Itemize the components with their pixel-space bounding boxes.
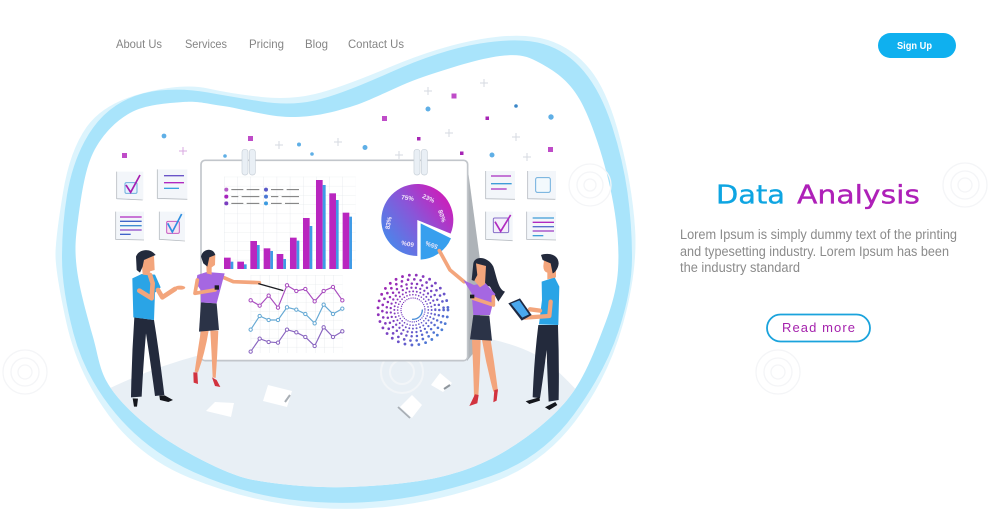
person: presenting woman: [193, 250, 283, 387]
navigation: About Us: [116, 37, 162, 51]
navigation: Pricing: [249, 37, 284, 51]
pie labels: 80%: [436, 209, 447, 224]
shirt: [132, 274, 161, 320]
pointer: [258, 284, 283, 291]
hair back: [472, 258, 505, 302]
shirt: [463, 280, 495, 315]
card: lines: [157, 169, 187, 199]
board clips: [242, 149, 427, 175]
red shoes: [469, 389, 498, 406]
phone: [215, 285, 219, 290]
read more button: Read more: [782, 320, 855, 335]
presentation board: [201, 149, 468, 361]
skirt: [470, 315, 492, 341]
violet line: [249, 326, 344, 353]
legs: [472, 340, 498, 397]
watermark spirals: [3, 163, 987, 394]
paper: crumpled: [263, 385, 292, 407]
trousers: [131, 317, 164, 397]
board panel: [201, 160, 468, 361]
arms: [139, 275, 175, 298]
person: thinking man: [131, 250, 185, 407]
blob background: [55, 36, 635, 509]
confetti: [122, 79, 554, 161]
arm bent: [473, 297, 493, 305]
description: the industry standard: [680, 260, 800, 275]
card: empty box: [528, 171, 556, 199]
navigation: Services: [185, 37, 227, 51]
sign up button: [878, 33, 956, 58]
hand: [175, 286, 185, 290]
navigation: Blog: [305, 37, 328, 51]
pie labels: 60%: [401, 239, 415, 248]
line chart: [249, 275, 344, 353]
paper: center: [398, 395, 422, 418]
skirt: [199, 302, 219, 332]
paper: left: [206, 402, 234, 417]
floor: [110, 340, 575, 488]
title: Analysis: [797, 180, 920, 210]
description: and typesetting industry. Lorem Ipsum has been: [680, 244, 949, 259]
shoes: [133, 395, 173, 407]
pie labels: [385, 193, 447, 250]
read more button: [767, 314, 870, 342]
arm pointing: [222, 277, 259, 283]
shirt: [539, 277, 559, 325]
bar chart: [224, 177, 356, 269]
magenta bars: [224, 180, 349, 269]
card: blue check: [159, 212, 185, 241]
person: man with tablet: [508, 254, 559, 410]
tablet: [508, 298, 532, 321]
pie labels: 55%: [424, 239, 439, 250]
head: [474, 263, 486, 287]
magenta line: [249, 284, 344, 309]
radial dot chart: [378, 275, 448, 345]
sign up button: Sign Up: [897, 41, 932, 52]
head: [206, 255, 215, 275]
red shoes: [193, 372, 220, 387]
blue line: [249, 303, 344, 331]
hair: [541, 254, 559, 273]
card: lines right: [486, 171, 515, 199]
title: [716, 180, 920, 210]
title: Data: [716, 180, 785, 210]
blue bars: [231, 185, 352, 269]
paper: right: [431, 373, 452, 392]
head: [543, 260, 556, 279]
left note cards: [116, 169, 187, 241]
card: check mark: [117, 172, 143, 200]
navigation: Contact Us: [348, 37, 404, 51]
legs: [195, 331, 218, 378]
hair: [201, 250, 215, 267]
shoes: [526, 397, 557, 410]
description: [680, 227, 957, 275]
board shadow: [467, 163, 480, 361]
card: list right: [527, 212, 556, 240]
phone: [470, 295, 474, 298]
pie chart: [381, 184, 453, 260]
arm holding phone: [195, 280, 215, 293]
trousers: [533, 325, 559, 402]
card: text list: [116, 212, 144, 240]
shirt: [196, 272, 225, 303]
arm up: [439, 251, 464, 282]
description: Lorem Ipsum is simply dummy text of the printing: [680, 227, 957, 242]
hair: [136, 250, 156, 273]
head: [141, 256, 155, 275]
right note cards: [486, 171, 556, 241]
pie labels: 83%: [385, 216, 394, 230]
card: check right: [486, 212, 513, 241]
pie labels: 23%: [421, 193, 436, 205]
pie blue slice: [421, 223, 451, 260]
person: pointing woman: [439, 251, 505, 406]
pie labels: 75%: [401, 194, 415, 203]
chart legend: [224, 188, 299, 205]
arm: [525, 302, 551, 318]
navigation: [116, 37, 404, 51]
